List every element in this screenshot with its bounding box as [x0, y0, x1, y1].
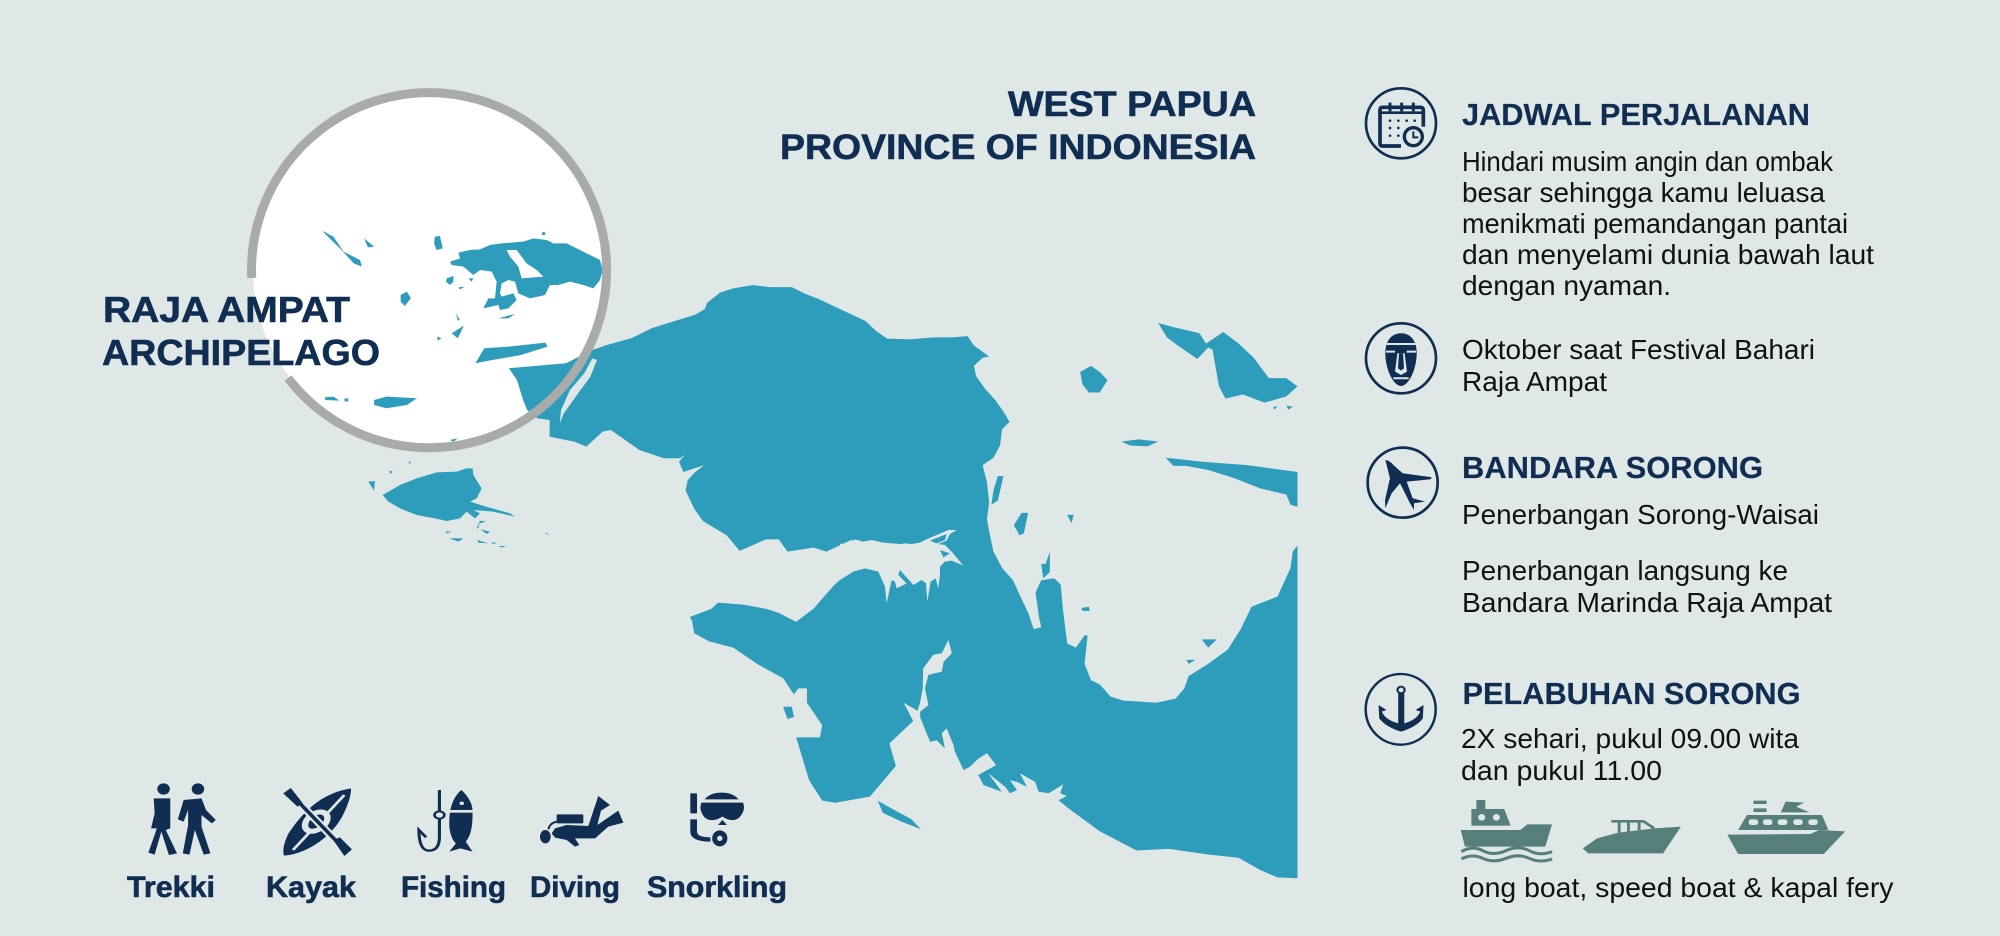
body text	[1462, 146, 1874, 301]
heading: BANDARA SORONG	[1462, 450, 1763, 485]
panel: Pelabuhan Sorong	[1366, 674, 1894, 903]
Waigeo island group	[434, 232, 603, 318]
body text: dengan nyaman.	[1462, 270, 1671, 301]
body text: long boat, speed boat & kapal fery	[1462, 872, 1894, 903]
body text: Penerbangan Sorong-Waisai	[1462, 499, 1819, 530]
activity labels: Trekki	[127, 871, 215, 904]
magnifier ring	[252, 93, 607, 448]
activity icons	[148, 783, 744, 856]
body text: Oktober saat Festival Bahari	[1462, 334, 1815, 365]
label: Raja Ampat Archipelago	[102, 289, 380, 373]
heading: PELABUHAN SORONG	[1462, 676, 1800, 711]
boats	[1461, 800, 1845, 861]
icon: speed boat	[1583, 821, 1681, 853]
icon: kayak	[283, 788, 352, 856]
label: Raja Ampat Archipelago: RAJA AMPAT	[103, 289, 350, 330]
body text: menikmati pemandangan pantai	[1462, 208, 1848, 239]
activity labels	[127, 871, 787, 904]
body text: Penerbangan langsung ke	[1462, 555, 1788, 586]
southern island	[368, 462, 550, 547]
activity labels: Snorkling	[647, 871, 787, 904]
body text: dan pukul 11.00	[1461, 755, 1662, 786]
western islands	[322, 231, 700, 458]
panel: Jadwal Perjalanan	[1366, 88, 1874, 301]
icon: trekking	[148, 783, 216, 855]
panel: Festival Bahari	[1366, 323, 1815, 397]
body text: besar sehingga kamu leluasa	[1462, 177, 1825, 208]
icon: anchor	[1366, 674, 1436, 745]
body text	[1462, 334, 1815, 397]
activity labels: Diving	[530, 871, 620, 904]
icon: tribal mask	[1366, 323, 1436, 393]
icon: fishing hook and fish	[419, 790, 475, 852]
activity labels: Kayak	[266, 871, 356, 904]
icon: snorkel	[690, 793, 744, 846]
icon: calendar	[1366, 88, 1436, 158]
body text: Hindari musim angin dan ombak	[1462, 146, 1834, 177]
icon: airplane	[1368, 448, 1438, 518]
body text: dan menyelami dunia bawah laut	[1462, 239, 1874, 270]
body text	[1461, 723, 1799, 786]
title: West Papua	[780, 85, 1256, 167]
body text	[1462, 499, 1832, 618]
body text: Bandara Marinda Raja Ampat	[1462, 587, 1832, 618]
label: Raja Ampat Archipelago: ARCHIPELAGO	[102, 332, 380, 373]
icon: long boat	[1461, 800, 1552, 861]
heading: JADWAL PERJALANAN	[1462, 97, 1810, 132]
icon: diver	[540, 796, 623, 847]
title: West Papua: WEST PAPUA	[1008, 85, 1256, 124]
body text: 2X sehari, pukul 09.00 wita	[1461, 723, 1799, 754]
mainland	[640, 285, 1297, 878]
panel: Bandara Sorong	[1368, 448, 1832, 618]
magnifier white circle	[253, 94, 605, 446]
body text: Raja Ampat	[1462, 366, 1607, 397]
activity labels: Fishing	[401, 871, 506, 904]
map: West Papua	[322, 231, 1297, 878]
title: West Papua: PROVINCE OF INDONESIA	[780, 128, 1256, 167]
bay detail	[840, 530, 963, 603]
icon: ferry	[1727, 801, 1845, 854]
